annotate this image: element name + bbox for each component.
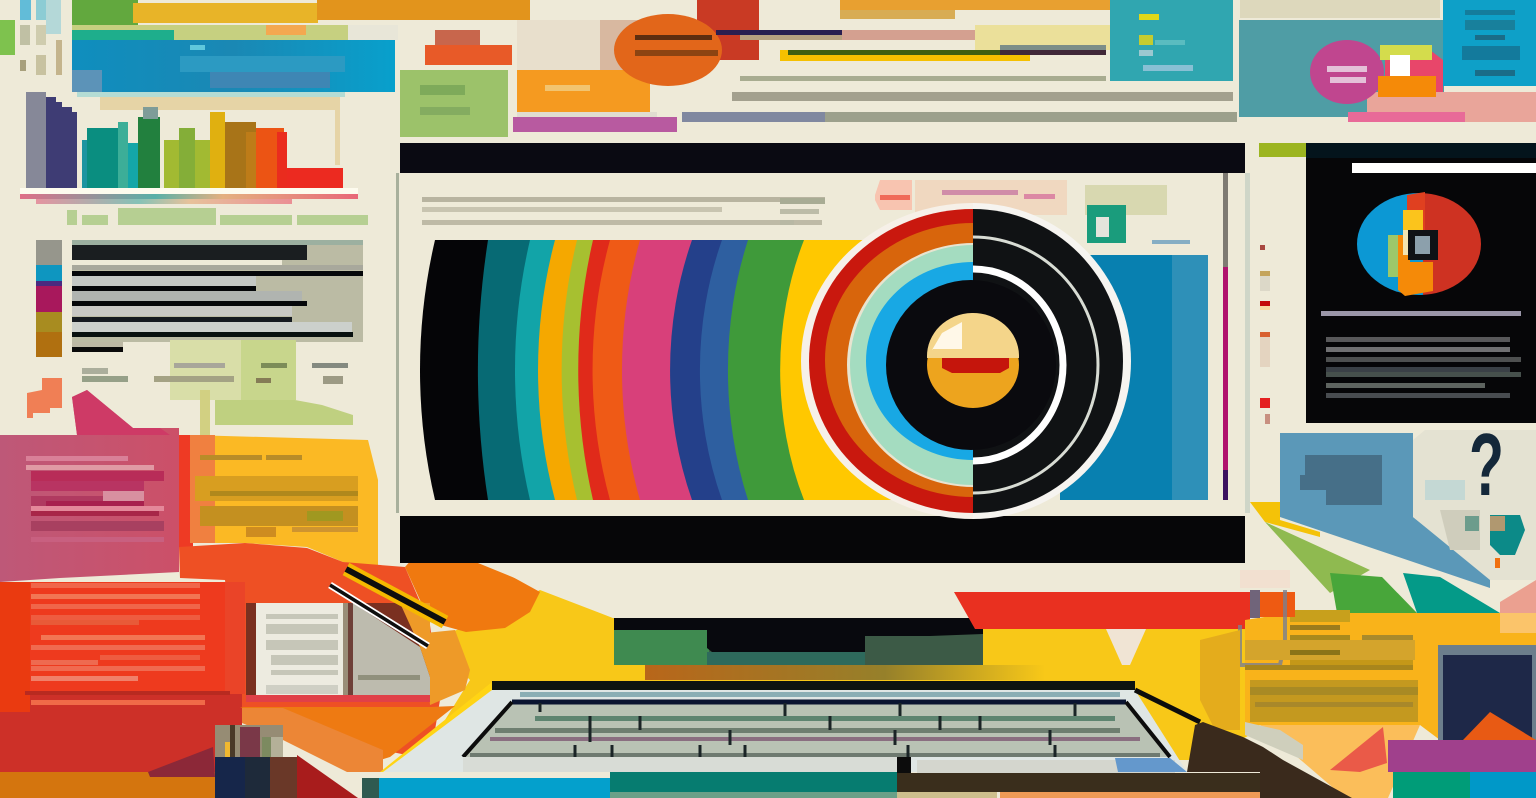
monitor bottom bezel bbox=[400, 516, 1245, 563]
yellow panel bbox=[1245, 610, 1536, 740]
blue banner bbox=[72, 40, 395, 97]
red text panel bbox=[0, 582, 245, 772]
open book bbox=[246, 603, 430, 702]
laptop yellow edge bbox=[380, 682, 500, 772]
yellow callout panel bbox=[179, 435, 378, 567]
top right collage bbox=[1239, 0, 1536, 122]
header lines right of badge bbox=[716, 0, 1110, 61]
gray lines bbox=[682, 76, 1237, 122]
blue screen panel bbox=[1060, 255, 1208, 500]
lower orange shapes bbox=[240, 706, 455, 772]
target right half bbox=[973, 203, 1131, 519]
pink callout panel bbox=[0, 390, 179, 582]
cream label note bbox=[517, 20, 617, 70]
green block bbox=[1393, 772, 1470, 798]
monitor bbox=[396, 143, 1245, 563]
orange circle badge bbox=[614, 14, 722, 86]
black text list bbox=[72, 240, 363, 352]
panel text lines bbox=[1326, 337, 1521, 398]
peach wedge bbox=[1260, 725, 1420, 798]
laptop bbox=[380, 681, 1200, 773]
pale green note with small labels bbox=[82, 340, 353, 435]
yellow panel text bbox=[1245, 625, 1418, 722]
screen heading lines bbox=[422, 197, 825, 225]
blue corner panel bbox=[1443, 0, 1536, 86]
laptop base stripes bbox=[362, 772, 1260, 798]
left gold block bbox=[1200, 630, 1240, 730]
orange patch beside book bbox=[425, 630, 470, 705]
teal side panel bbox=[1110, 0, 1233, 81]
yellow desk field bbox=[420, 590, 1260, 760]
frame edge lines bbox=[396, 173, 399, 513]
red block bbox=[697, 0, 759, 60]
pie chart bbox=[1357, 192, 1481, 296]
vertical tick strip bbox=[1245, 173, 1270, 513]
keyboard bbox=[463, 702, 1170, 757]
dark framed picture bbox=[1438, 645, 1536, 746]
teal card bbox=[1239, 20, 1444, 117]
bar chart bbox=[20, 92, 358, 204]
cream area under monitor bbox=[478, 563, 1245, 618]
orange blob above desk bbox=[405, 558, 540, 632]
screen small icons bbox=[875, 180, 1190, 244]
top-left header strips bbox=[0, 0, 530, 75]
black diagonal stripes bbox=[330, 569, 445, 646]
panel gray rule bbox=[1321, 311, 1521, 316]
pink lower strip bbox=[1348, 92, 1536, 122]
question mark panel bbox=[1413, 416, 1536, 580]
orange base strip bbox=[0, 772, 215, 798]
rainbow arcs bbox=[420, 240, 973, 500]
green heading text band bbox=[67, 208, 368, 225]
pencil cup bbox=[148, 725, 358, 798]
red-orange background shapes bbox=[179, 543, 440, 760]
white corner wedge bbox=[1245, 722, 1303, 760]
top cream note bbox=[1240, 0, 1440, 18]
green wedge bbox=[1330, 573, 1417, 613]
diagonal black edge bbox=[1135, 690, 1200, 722]
red white flag bbox=[1378, 45, 1443, 97]
monitor top bezel bbox=[400, 143, 1245, 173]
target left half bbox=[801, 203, 973, 519]
monitor stand bbox=[614, 618, 1045, 680]
blue block bbox=[1470, 772, 1536, 798]
right black panel bbox=[1259, 143, 1536, 423]
magenta oval bbox=[1310, 40, 1384, 104]
orange label with pink base bbox=[513, 70, 677, 132]
colored sidebar bbox=[36, 240, 62, 357]
top center collage bbox=[400, 0, 1237, 137]
right lower collage bbox=[1187, 416, 1536, 798]
question mark panel: ? bbox=[1469, 416, 1504, 514]
yellow wedge bbox=[1250, 502, 1320, 537]
monitor screen bbox=[400, 173, 1245, 516]
orange note shape bbox=[27, 378, 62, 418]
tan block bbox=[600, 20, 640, 95]
trackpad and palm rest bbox=[463, 757, 1187, 773]
teal wedge bbox=[1403, 573, 1500, 613]
red banner bbox=[954, 592, 1250, 665]
blue map panel bbox=[1280, 433, 1490, 588]
purple block bbox=[1388, 740, 1536, 772]
brown desk corner bbox=[1187, 722, 1352, 798]
target center dot bbox=[927, 313, 1019, 408]
laptop screen hinge bbox=[492, 681, 1135, 690]
laptop body bbox=[383, 690, 1187, 772]
small teal icon bbox=[1465, 515, 1525, 568]
target black core bbox=[886, 280, 1056, 450]
paperclip tag bbox=[1240, 570, 1295, 665]
pink corner bbox=[1500, 580, 1536, 613]
red small wedge bbox=[1330, 727, 1387, 772]
orange green note bbox=[400, 30, 512, 137]
lime wedge bbox=[1265, 522, 1370, 593]
